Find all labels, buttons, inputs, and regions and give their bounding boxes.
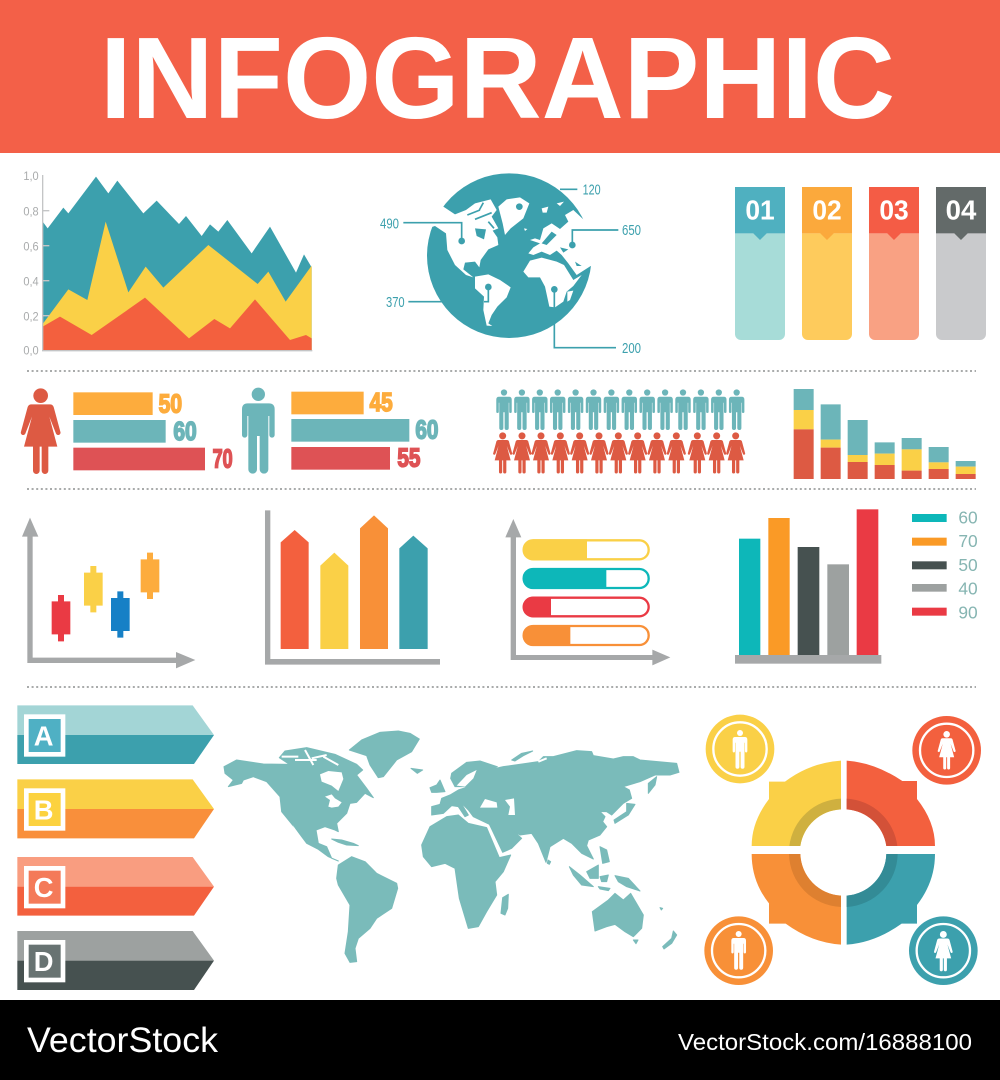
area chart: 0,6 — [23, 239, 39, 253]
south america — [337, 857, 398, 962]
area chart — [23, 169, 312, 357]
globe with callouts: 490 — [380, 216, 399, 232]
gender bars: 60 — [415, 415, 438, 445]
stacked bar chart — [794, 389, 976, 479]
globe with callouts: 120 — [583, 182, 601, 198]
arrow B: B — [34, 794, 54, 825]
gender bars: 45 — [370, 387, 393, 417]
legend: 90 — [958, 602, 978, 622]
header banner — [0, 0, 1000, 153]
area chart: 0,2 — [23, 309, 39, 323]
arrow D: D — [34, 946, 54, 977]
madagascar — [501, 894, 508, 915]
arrow A: A — [34, 720, 54, 751]
badge: teal woman — [909, 916, 978, 985]
area chart: 0,4 — [23, 274, 39, 288]
sri lanka — [547, 860, 551, 864]
globe with callouts: 370 — [386, 295, 405, 311]
column 01 — [735, 187, 785, 340]
footer — [0, 1000, 1000, 1080]
gender bars: 60 — [173, 416, 197, 446]
greenland — [349, 731, 419, 778]
arrow D — [17, 931, 214, 990]
novaya zemlya — [512, 751, 533, 761]
footer url: VectorStock.com/16888100 — [678, 1029, 972, 1055]
new zealand — [663, 931, 677, 949]
legend — [912, 507, 978, 622]
badge: orange man — [704, 916, 773, 985]
label arrows A-D — [17, 705, 214, 990]
iceland — [411, 768, 423, 773]
column 01: 01 — [745, 194, 775, 225]
column 03: 03 — [879, 194, 909, 225]
column 04 — [936, 187, 986, 340]
column chart with legend — [735, 507, 978, 664]
globe with callouts: 650 — [622, 223, 641, 239]
area chart: 0,0 — [23, 343, 39, 357]
britain — [430, 780, 445, 792]
segment: orange — [752, 854, 841, 945]
philippines — [600, 847, 609, 863]
gender bars: 70 — [213, 444, 233, 474]
footer brand: VectorStock — [27, 1021, 219, 1060]
icon: man — [242, 388, 275, 474]
sulawesi — [600, 875, 608, 882]
arrow C: C — [34, 872, 54, 903]
gender bars: 55 — [397, 442, 420, 472]
java — [598, 887, 610, 891]
arrow column chart — [265, 510, 440, 665]
area chart: 1,0 — [23, 169, 39, 183]
title: INFOGRAPHIC — [100, 13, 895, 143]
new guinea — [615, 876, 640, 891]
legend: 40 — [958, 579, 978, 599]
world map — [224, 731, 679, 962]
column 02 — [802, 187, 852, 340]
gender bars: 50 — [159, 388, 182, 418]
arrow B — [17, 779, 214, 838]
globe with callouts — [380, 173, 641, 357]
segment: yellow — [752, 761, 841, 846]
icon: woman — [21, 388, 61, 474]
segment: teal — [847, 854, 935, 945]
badge: red woman — [912, 716, 981, 785]
progress bar 1 — [523, 539, 649, 560]
progress bar 3 — [523, 597, 649, 617]
australia — [592, 893, 643, 937]
arrow C — [17, 857, 214, 916]
eurasia — [432, 751, 679, 862]
sakhalin — [648, 777, 657, 793]
legend: 50 — [958, 555, 978, 575]
japan — [614, 803, 635, 823]
progress bar 4 — [523, 625, 649, 646]
candlestick chart — [22, 518, 195, 668]
legend: 70 — [958, 531, 978, 551]
arrow A — [17, 705, 214, 764]
column 03 — [869, 187, 919, 340]
segment: red — [847, 761, 935, 846]
borneo — [587, 865, 598, 878]
pictogram: rows of people — [493, 389, 745, 473]
column 04: 04 — [946, 194, 977, 225]
legend: 60 — [958, 507, 978, 527]
badge: yellow man — [706, 715, 774, 783]
globe with callouts: 200 — [622, 341, 641, 357]
progress bar 2 — [523, 568, 649, 589]
ring diagram with people badges — [704, 715, 981, 985]
numbered columns 01-04 — [735, 187, 986, 340]
sumatra — [569, 867, 593, 887]
progress bars chart — [505, 519, 670, 665]
africa — [422, 815, 511, 928]
caribbean — [332, 839, 358, 846]
gender bars — [21, 387, 438, 474]
column 02: 02 — [812, 194, 842, 225]
north america — [224, 748, 373, 861]
area chart: 0,8 — [23, 204, 39, 218]
